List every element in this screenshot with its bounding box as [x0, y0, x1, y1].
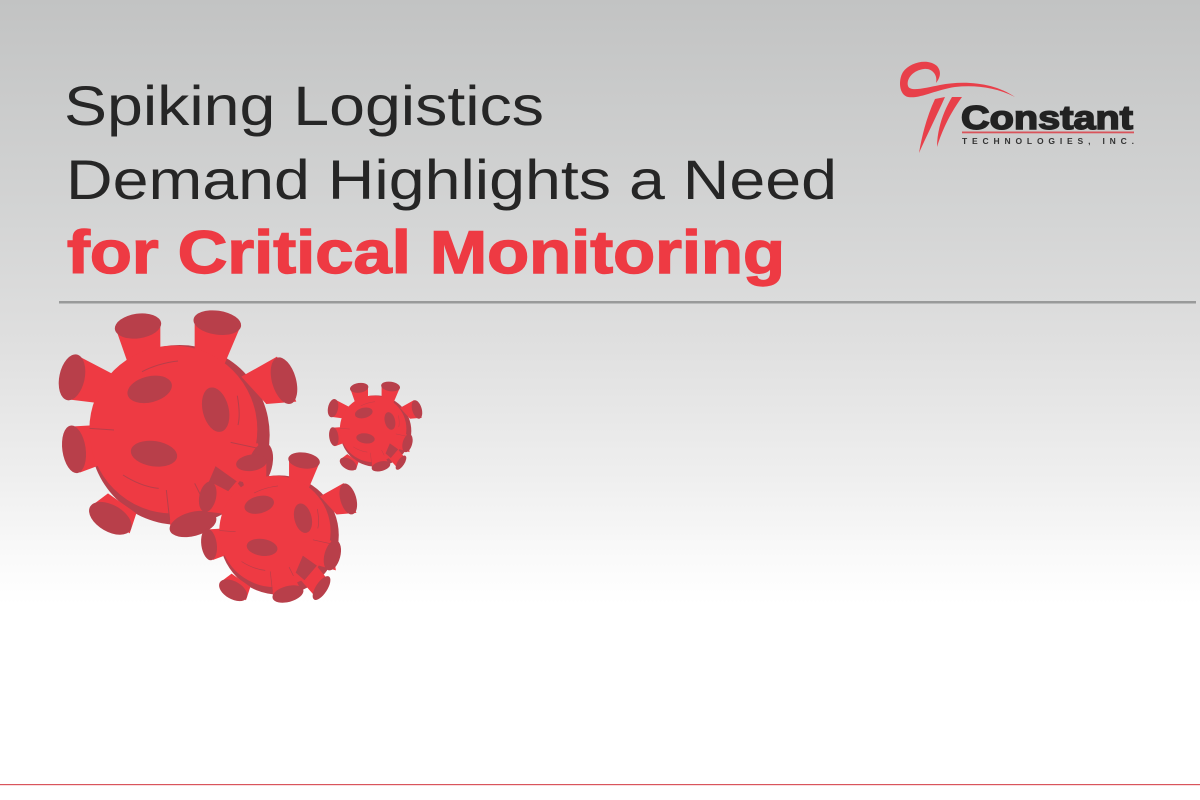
- icon: medium virus: [196, 450, 360, 606]
- logo swoosh mark: [900, 62, 1015, 153]
- logo underline: [962, 132, 1134, 133]
- divider rule: [59, 301, 1196, 304]
- icon: large virus: [55, 307, 302, 542]
- title line 1: Spiking Logistics: [64, 74, 544, 137]
- logo: Constant Technologies, Inc.: [900, 62, 1134, 153]
- logo tagline: TECHNOLOGIES, INC.: [962, 136, 1134, 146]
- logo wordmark: Constant: [961, 99, 1133, 136]
- title: [64, 74, 837, 286]
- icon: small virus: [326, 380, 424, 473]
- bottom rule: [0, 784, 1200, 785]
- title line 3 highlighted: for Critical Monitoring: [67, 219, 785, 286]
- title line 2: Demand Highlights a Need: [66, 148, 837, 211]
